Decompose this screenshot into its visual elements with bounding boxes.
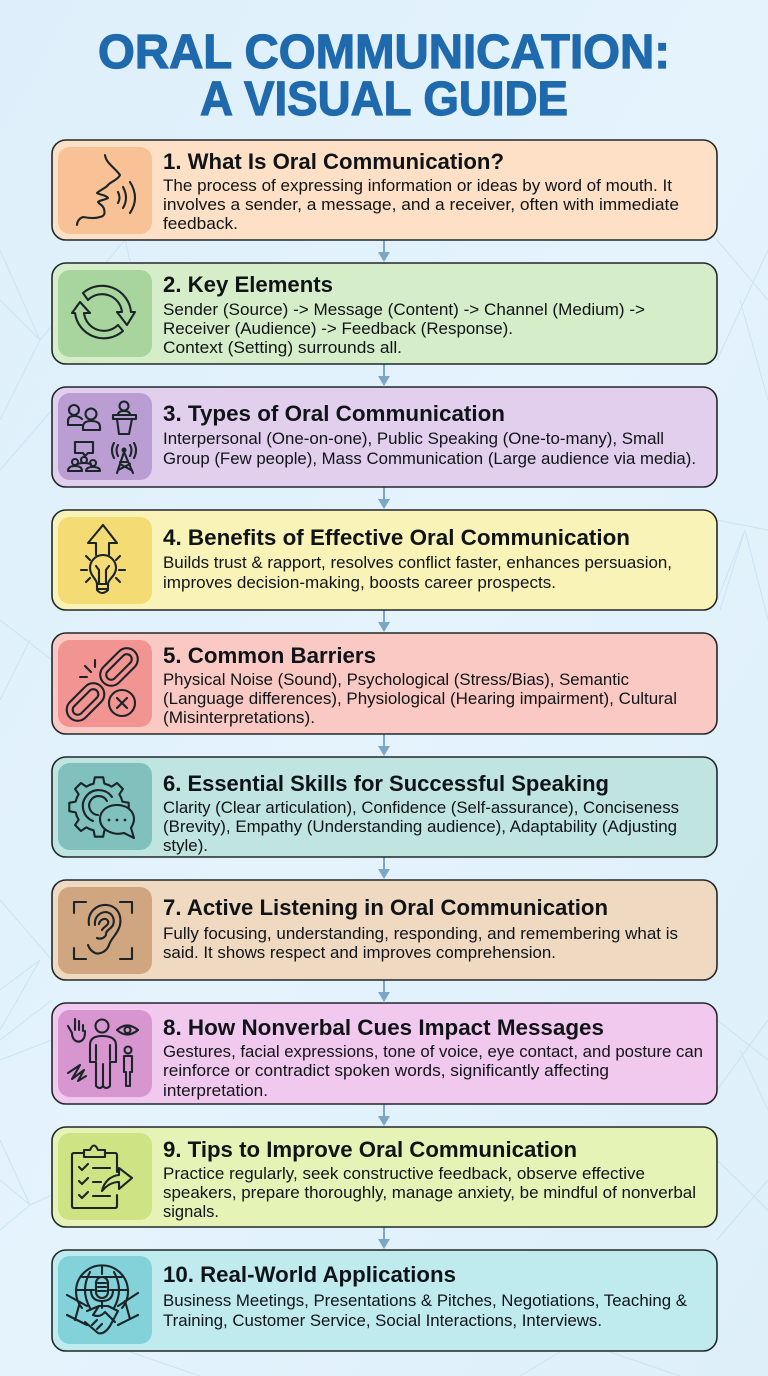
heading: 9. Tips to Improve Oral Communication — [163, 1137, 577, 1162]
text block: Builds trust & rapport, resolves conflict faster, enhances persuasion, — [163, 553, 672, 572]
icon: broken chain — [58, 640, 152, 727]
panel: benefits — [52, 510, 717, 610]
arrow: card 5 to 6 — [378, 734, 390, 756]
title — [98, 26, 670, 126]
text block: said. It shows respect and improves comprehension. — [163, 943, 556, 962]
icon: body language — [58, 1010, 152, 1097]
text block — [163, 300, 645, 357]
text block: feedback. — [163, 214, 238, 233]
arrow: card 3 to 4 — [378, 487, 390, 509]
heading: 6. Essential Skills for Successful Speaking — [163, 771, 609, 796]
text block — [163, 924, 678, 962]
icon: gear and speech bubble — [58, 763, 152, 850]
text block: The process of expressing information or ideas by word of mouth. It — [163, 176, 672, 195]
panel: active listening — [52, 880, 717, 980]
heading: 4. Benefits of Effective Oral Communication — [163, 525, 630, 550]
arrow: card 7 to 8 — [378, 980, 390, 1002]
text block — [163, 429, 696, 468]
arrow: card 2 to 3 — [378, 364, 390, 386]
text block — [163, 1291, 688, 1330]
heading: 8. How Nonverbal Cues Impact Messages — [163, 1015, 604, 1040]
text block: Sender (Source) -> Message (Content) -> Channel (Medium) -> — [163, 300, 645, 319]
heading: 7. Active Listening in Oral Communication — [163, 895, 608, 920]
icon: speaking face — [58, 147, 152, 234]
panel: what is oral communication — [52, 140, 717, 240]
text block: Context (Setting) surrounds all. — [163, 338, 402, 357]
text block: Training, Customer Service, Social Interactions, Interviews. — [163, 1311, 602, 1330]
text block: Clarity (Clear articulation), Confidence (Self-assurance), Conciseness — [163, 798, 679, 817]
icon: ear — [58, 887, 152, 974]
panel: essential skills — [52, 757, 717, 857]
text block: style). — [163, 836, 208, 855]
panel: common barriers — [52, 633, 717, 734]
arrow: card 8 to 9 — [378, 1104, 390, 1126]
arrow: card 4 to 5 — [378, 610, 390, 632]
text block: (Language differences), Physiological (Hearing impairment), Cultural — [163, 689, 677, 708]
text block: Interpersonal (One-on-one), Public Speaking (One-to-many), Small — [163, 429, 664, 448]
text block: Group (Few people), Mass Communication (Large audience via media). — [163, 449, 696, 468]
text block: Receiver (Audience) -> Feedback (Response). — [163, 319, 513, 338]
heading: 1. What Is Oral Communication? — [163, 149, 504, 174]
icon: communication types — [58, 393, 152, 480]
text block — [163, 553, 672, 592]
panel: key elements — [52, 263, 717, 364]
text block: improves decision-making, boosts career prospects. — [163, 573, 556, 592]
title: A VISUAL GUIDE — [200, 73, 568, 126]
text block: (Misinterpretations). — [163, 708, 315, 727]
text block: Business Meetings, Presentations & Pitches, Negotiations, Teaching & — [163, 1291, 688, 1310]
icon: cycle arrows — [58, 270, 152, 357]
text block: interpretation. — [163, 1081, 268, 1100]
text block: signals. — [163, 1202, 219, 1221]
text block — [163, 1042, 703, 1100]
heading: 5. Common Barriers — [163, 643, 376, 668]
heading: 3. Types of Oral Communication — [163, 401, 505, 426]
text block — [163, 176, 679, 233]
text block: Physical Noise (Sound), Psychological (Stress/Bias), Semantic — [163, 670, 629, 689]
text block — [163, 798, 679, 855]
text block: (Brevity), Empathy (Understanding audience), Adaptability (Adjusting — [163, 817, 677, 836]
text block: involves a sender, a message, and a receiver, often with immediate — [163, 195, 679, 214]
heading: 10. Real-World Applications — [163, 1262, 456, 1287]
icon: globe, microphone and handshake — [58, 1256, 152, 1344]
heading: 2. Key Elements — [163, 272, 333, 297]
panel: nonverbal cues — [52, 1003, 717, 1104]
text block — [163, 670, 677, 727]
text block: Fully focusing, understanding, responding, and remembering what is — [163, 924, 678, 943]
panel: types of oral communication — [52, 387, 717, 487]
panel: tips — [52, 1127, 717, 1227]
text block — [163, 1164, 696, 1221]
arrow: card 9 to 10 — [378, 1227, 390, 1249]
panel: real-world applications — [52, 1250, 717, 1351]
icon: light bulb and arrow — [58, 517, 152, 604]
text block: Gestures, facial expressions, tone of voice, eye contact, and posture can — [163, 1042, 703, 1061]
title: ORAL COMMUNICATION: — [98, 26, 670, 79]
text block: Practice regularly, seek constructive feedback, observe effective — [163, 1164, 645, 1183]
icon: clipboard checklist — [58, 1133, 152, 1220]
arrow: card 6 to 7 — [378, 857, 390, 879]
text block: reinforce or contradict spoken words, significantly affecting — [163, 1061, 609, 1080]
arrow: card 1 to 2 — [378, 240, 390, 262]
text block: speakers, prepare thoroughly, manage anxiety, be mindful of nonverbal — [163, 1183, 696, 1202]
